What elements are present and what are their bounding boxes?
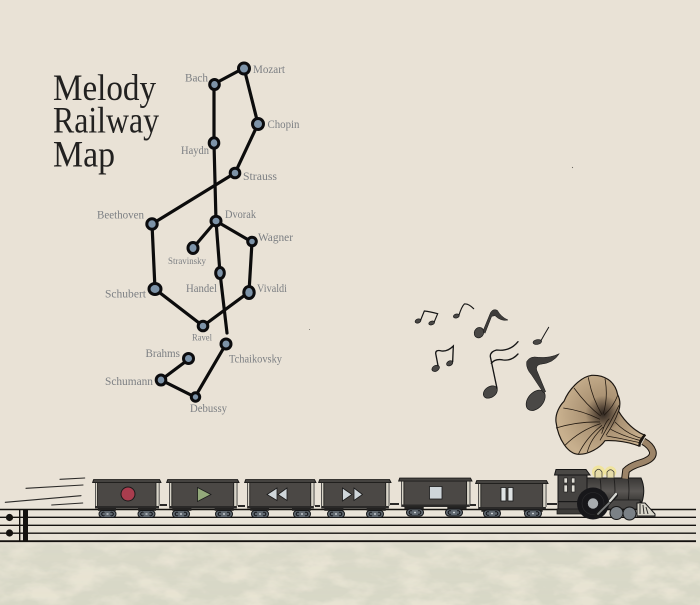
note: large flag — [522, 354, 559, 414]
coupler — [315, 505, 320, 507]
train car: play — [167, 480, 239, 518]
railway map — [147, 63, 264, 401]
station: Wagner — [248, 237, 256, 246]
icon: play triangle — [198, 488, 211, 502]
icon: rewind triangles — [267, 488, 287, 500]
train car: record — [93, 480, 161, 518]
vinyl record — [577, 488, 609, 520]
station labels: Brahms — [146, 348, 180, 360]
paper band behind staff — [0, 500, 700, 542]
station: Bach — [210, 80, 219, 90]
station labels: Beethoven — [97, 210, 144, 222]
coupler — [238, 505, 245, 507]
horn tube outline — [625, 441, 653, 479]
title: Railway — [53, 100, 159, 142]
tonearm head — [610, 494, 616, 501]
horn tube fill — [625, 441, 653, 479]
station labels: Chopin — [268, 119, 300, 131]
station labels: Vivaldi — [257, 283, 287, 295]
cowcatcher — [637, 503, 655, 516]
locomotive boiler — [586, 478, 644, 502]
coupler — [470, 504, 476, 506]
specks — [309, 167, 573, 330]
cowcatcher slats — [640, 504, 648, 514]
station labels: Stravinsky — [168, 256, 206, 266]
station labels: Dvorak — [225, 209, 256, 221]
station: Stravinsky — [188, 242, 198, 254]
tonearm highlight — [598, 503, 609, 514]
note: beamed pair — [431, 346, 454, 373]
station: Ravel — [198, 321, 208, 331]
station: Chopin — [252, 118, 264, 130]
station labels: Strauss — [243, 171, 278, 183]
station: Beethoven — [147, 219, 157, 229]
station: Schumann — [156, 375, 166, 385]
station: Haydn — [209, 138, 219, 148]
horn ribs — [556, 377, 643, 454]
icon: pause bars — [501, 488, 513, 501]
station labels: Debussy — [190, 403, 227, 415]
coupler — [390, 503, 399, 505]
station: Dvorak — [211, 216, 221, 226]
ground texture — [0, 542, 700, 605]
title: Map — [53, 134, 115, 176]
station labels: Ravel — [192, 334, 212, 344]
station: Schubert — [149, 284, 161, 294]
station labels: Handel — [186, 283, 217, 295]
drive wheels — [610, 506, 636, 520]
station: Brahms — [184, 354, 194, 364]
running board — [606, 500, 640, 509]
station labels: Haydn — [181, 145, 209, 157]
coupler — [160, 504, 167, 506]
route lines — [152, 68, 258, 397]
vacuum tubes — [592, 466, 616, 478]
note: small beamed pair — [414, 311, 438, 326]
title: Melody — [53, 68, 156, 109]
horn flare — [556, 375, 645, 454]
note: small tail — [533, 327, 549, 345]
note: medium flag — [473, 310, 508, 339]
title — [53, 68, 159, 176]
station labels: Bach — [185, 72, 208, 84]
train car: fast forward — [319, 480, 391, 518]
station: Debussy — [191, 393, 200, 401]
speed lines — [5, 478, 85, 505]
station labels: Schubert — [105, 288, 147, 300]
coupler — [547, 503, 557, 505]
note: double flag — [481, 342, 518, 401]
note: small flag — [453, 304, 474, 319]
station: Vivaldi — [244, 286, 254, 298]
boiler bands — [600, 478, 629, 502]
station labels: Wagner — [258, 232, 293, 244]
gramophone locomotive — [554, 375, 655, 520]
station labels: Schumann — [105, 376, 153, 388]
train car: stop — [399, 478, 472, 516]
station: Mozart — [238, 63, 250, 74]
locomotive cab — [554, 470, 590, 514]
horn collar — [639, 435, 645, 447]
tonearm — [596, 495, 616, 516]
station: Strauss — [230, 168, 240, 178]
icon: fast forward triangles — [342, 488, 362, 501]
station: Handel — [216, 268, 224, 278]
station: Tchaikovsky — [221, 339, 231, 349]
icon: record circle — [121, 487, 135, 501]
music notes — [414, 304, 559, 414]
train car: pause — [476, 481, 548, 517]
station labels: Tchaikovsky — [229, 354, 282, 366]
station labels — [97, 64, 300, 415]
musical staff track — [0, 509, 696, 542]
gramophone horn — [556, 375, 653, 479]
train car: rewind — [245, 480, 316, 518]
icon: stop square — [430, 486, 442, 499]
station labels: Mozart — [253, 64, 286, 76]
